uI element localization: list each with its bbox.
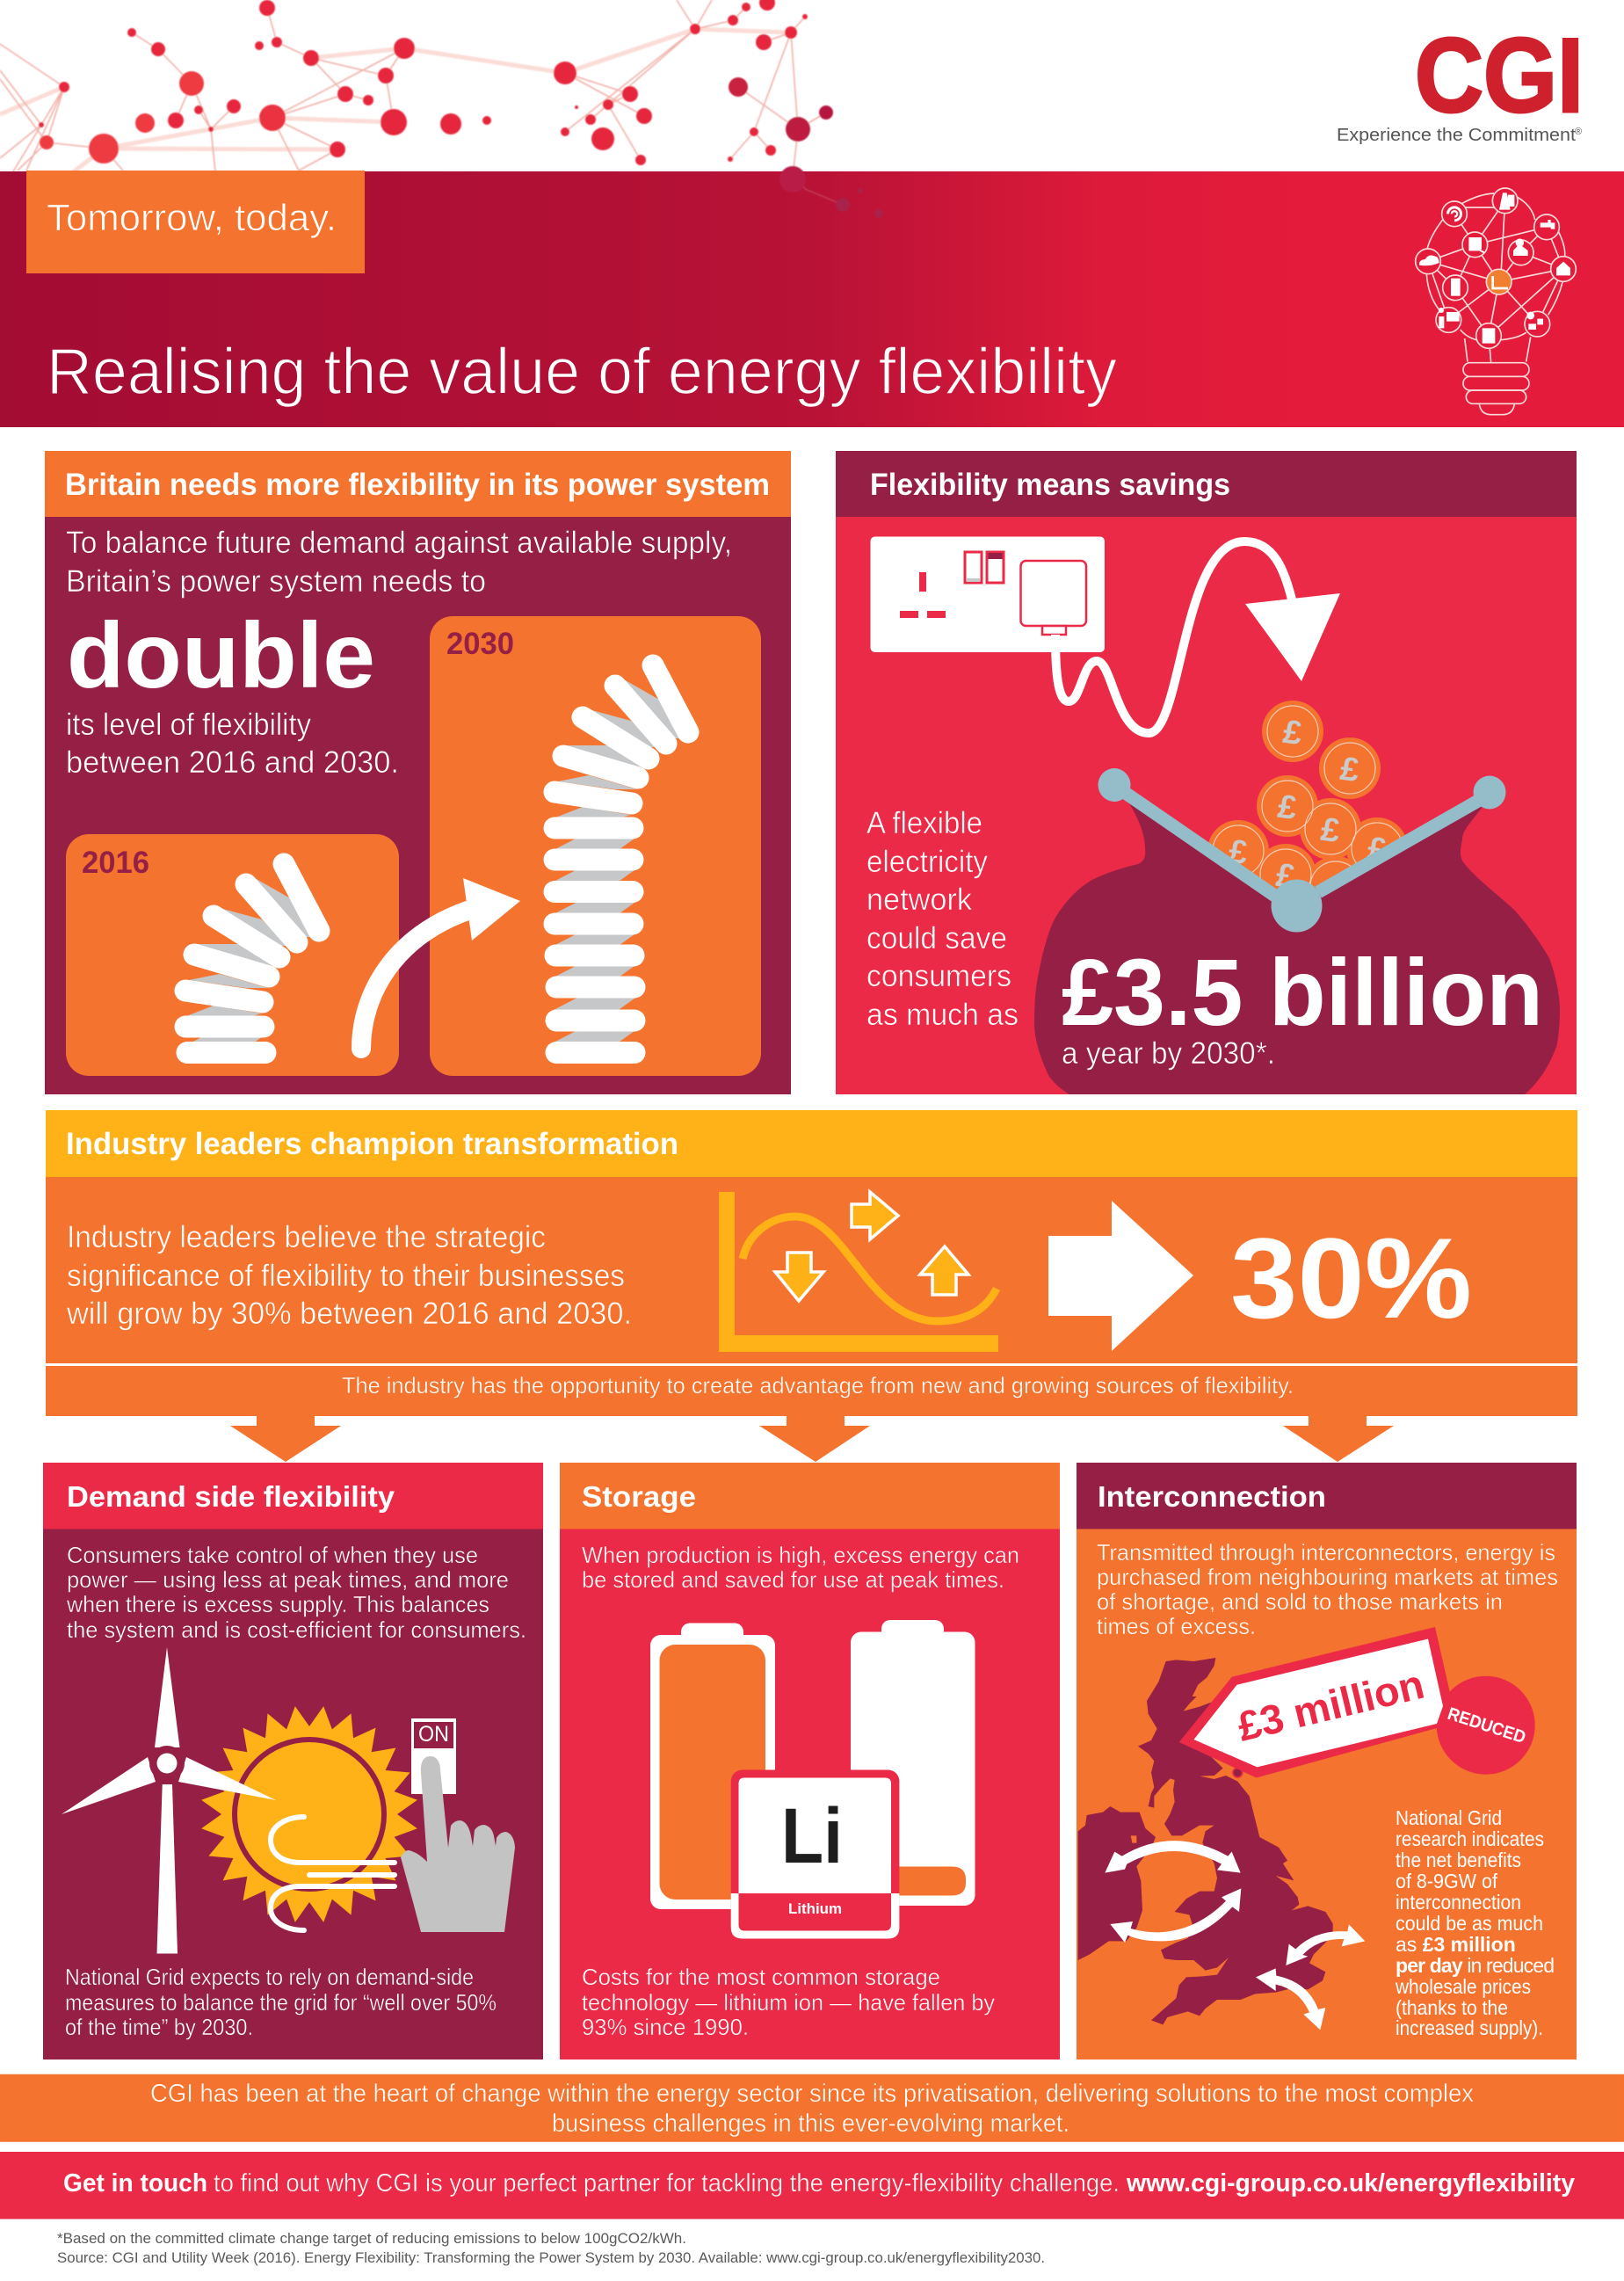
- big number: 30%: 30%: [1230, 1214, 1472, 1342]
- panel: Flexibility means savings: [836, 451, 1577, 1094]
- big word: double: double: [67, 604, 375, 708]
- body text: be stored and saved for use at peak times.: [582, 1566, 1004, 1593]
- body text: purchased from neighbouring markets at times: [1097, 1564, 1558, 1590]
- icon: purse: [1034, 768, 1560, 1094]
- box: 2030 spring: 2030: [446, 627, 514, 661]
- body text: [1097, 1539, 1558, 1639]
- follow-on text: between 2016 and 2030.: [66, 745, 399, 780]
- body text: when there is excess supply. This balances: [66, 1591, 489, 1617]
- heading: Britain needs more flexibility in its power system: [65, 468, 770, 502]
- text: a flexible electricity network: as much as: [866, 998, 1019, 1032]
- price tag: £3 million: REDUCED: [1445, 1704, 1528, 1747]
- icon: coins: £: [1275, 788, 1299, 827]
- panel: Industry leaders champion transformation: [46, 1110, 1577, 1363]
- logo: CGI: [1337, 17, 1584, 145]
- follow-on text: its level of flexibility: [66, 708, 311, 742]
- footnote text: of the time” by 2030.: [65, 2014, 253, 2040]
- band: CGI heart of change: business challenges in this ever-evolving market.: [552, 2110, 1069, 2138]
- follow-on text: [66, 708, 399, 780]
- title banner: [0, 166, 1624, 427]
- band: get in touch: Get in touch: [63, 2169, 207, 2197]
- text: a flexible electricity network: A flexible: [866, 806, 982, 840]
- arrow: cable to coins: [1055, 541, 1340, 733]
- panel: Interconnection: [1077, 1463, 1577, 2059]
- panel: Britain needs more flexibility: [45, 451, 791, 1094]
- logo: CGI: ®: [1575, 127, 1582, 137]
- band: get in touch: to find out why CGI is your perfect partner for tackling the energy-flexibility challenge.: [214, 2169, 1120, 2197]
- icon: coins: £: [1338, 751, 1361, 789]
- body text: [66, 1542, 526, 1643]
- lithium element card: Li: [781, 1791, 843, 1879]
- icon: ON switch: ON: [418, 1722, 449, 1747]
- icon: network lightbulb: [1416, 188, 1576, 415]
- side text: research indicates: [1396, 1827, 1544, 1850]
- footnote text: [582, 1964, 995, 2040]
- band: get in touch: www.cgi-group.co.uk/energyflexibility: [1126, 2169, 1575, 2197]
- icon: full battery: [650, 1623, 775, 1909]
- map: UK and Ireland: [1078, 1658, 1365, 2030]
- text: industry leaders believe: [66, 1220, 632, 1331]
- logo: CGI: Experience the Commitment: [1337, 126, 1576, 145]
- side text: interconnection: [1396, 1891, 1521, 1914]
- icon: coins: £: [1318, 811, 1342, 850]
- icon: coins: [1207, 701, 1408, 918]
- text: a flexible electricity network: consumers: [866, 959, 1011, 993]
- side text: wholesale prices: [1395, 1975, 1531, 1998]
- footnote text: technology — lithium ion — have fallen by: [582, 1989, 995, 2016]
- box: 2016 spring: 2016: [82, 846, 149, 880]
- side text: National Grid: [1396, 1806, 1502, 1829]
- text: industry leaders believe: significance of flexibility to their businesses: [67, 1259, 625, 1293]
- arrow: 2016 to 2030: [361, 878, 520, 1049]
- footnote text: Costs for the most common storage: [582, 1964, 940, 1990]
- lithium element card: Lithium: [788, 1900, 842, 1917]
- text: industry leaders believe: will grow by 30% between 2016 and 2030.: [66, 1297, 632, 1331]
- icon: coins: £: [1280, 714, 1304, 752]
- intro text: Britain’s power system needs to: [66, 564, 486, 599]
- arrows: interconnector flows: [1105, 1841, 1365, 2030]
- intro text: To balance future demand against available supply,: [66, 526, 732, 560]
- arrow: big white: [1048, 1201, 1193, 1351]
- side text: increased supply).: [1396, 2016, 1543, 2039]
- tagline box: [26, 171, 365, 273]
- footnote text: measures to balance the grid for “well over 50%: [65, 1989, 497, 2016]
- text: industry leaders believe: Industry leaders believe the strategic: [67, 1220, 546, 1254]
- band: get in touch: [0, 2152, 1624, 2219]
- text: a flexible electricity network: network: [866, 883, 972, 917]
- body text: the system and is cost-efficient for consumers.: [67, 1616, 526, 1643]
- side text: per day in reduced: [1396, 1954, 1555, 1977]
- footnote text: 93% since 1990.: [582, 2014, 749, 2040]
- tagline box: Tomorrow, today.: [47, 197, 337, 239]
- lithium element card: [731, 1770, 899, 1939]
- footnote and source: *Based on the committed climate change target of reducing emissions to below 100gCO2/kWh.: [57, 2230, 686, 2247]
- side text: the net benefits: [1396, 1849, 1521, 1871]
- side text: could be as much: [1396, 1912, 1543, 1935]
- footnote and source: [57, 2230, 1045, 2266]
- logo: CGI: CGI: [1415, 17, 1584, 134]
- side text: as £3 million: [1396, 1933, 1516, 1956]
- heading: Interconnection: [1098, 1480, 1326, 1513]
- arrows: down to columns: [230, 1415, 1394, 1462]
- body text: of shortage, and sold to those markets in: [1097, 1588, 1503, 1615]
- faded network nodes on banner: [779, 166, 883, 218]
- icon: sun: [201, 1706, 417, 1922]
- body text: Transmitted through interconnectors, energy is: [1097, 1539, 1555, 1565]
- intro text: [66, 526, 732, 599]
- box: 2030 spring: [430, 616, 761, 1076]
- chart: flexibility curve: [719, 1192, 998, 1352]
- text: a flexible electricity network: electricity: [866, 845, 988, 879]
- panel: Storage: [560, 1463, 1060, 2059]
- icon: coins: £: [1226, 833, 1250, 872]
- panel: Demand side flexibility: [43, 1463, 543, 2059]
- icon: coins: £: [1273, 857, 1297, 896]
- body text: power — using less at peak times, and more: [67, 1566, 509, 1593]
- body text: times of excess.: [1097, 1613, 1256, 1639]
- icon: coins: £: [1323, 869, 1347, 908]
- title: Realising the value of energy flexibility: [47, 335, 1117, 408]
- heading: Storage: [582, 1480, 696, 1513]
- band: opportunity with arrows: [46, 1366, 1577, 1462]
- side text: (thanks to the: [1396, 1996, 1508, 2019]
- band: CGI heart of change: [0, 2074, 1624, 2141]
- body text: When production is high, excess energy can: [582, 1542, 1019, 1568]
- icon: wind lines: [271, 1817, 395, 1930]
- icon: wind turbine: [62, 1647, 276, 1953]
- icon: ON switch: [411, 1718, 456, 1794]
- caption: a year by 2030: a year by 2030*.: [1062, 1036, 1275, 1071]
- text: a flexible electricity network: [866, 806, 1019, 1032]
- footnote and source: Source: CGI and Utility Week (2016). Energy Flexibility: Transforming the Power System by 2030. Available: www.cgi-group.co.uk/energyflexibility2030.: [57, 2249, 1045, 2266]
- price tag: £3 million: £3 million: [1233, 1660, 1428, 1750]
- band: opportunity with arrows: The industry has the opportunity to create advantage from new and growing sources of flexibility.: [342, 1372, 1294, 1398]
- header network decoration: [0, 0, 879, 229]
- heading: Industry leaders champion transformation: [66, 1127, 678, 1161]
- footnote text: [65, 1964, 497, 2040]
- body text: [582, 1542, 1019, 1593]
- big number: £3.5 billion: £3.5 billion: [1062, 939, 1543, 1045]
- heading: Demand side flexibility: [67, 1480, 395, 1513]
- text: a flexible electricity network: could save: [866, 921, 1007, 955]
- icon: empty battery: [851, 1620, 975, 1906]
- heading: Flexibility means savings: [870, 468, 1230, 502]
- side text: [1395, 1806, 1555, 2039]
- icon: coins: £: [1365, 831, 1388, 869]
- body text: Consumers take control of when they use: [67, 1542, 478, 1568]
- band: CGI heart of change: CGI has been at the heart of change within the energy sector since its privatisation, delivering solutions to the most complex: [150, 2080, 1474, 2108]
- box: 2016 spring: [66, 834, 399, 1076]
- footnote text: National Grid expects to rely on demand-side: [65, 1964, 474, 1990]
- icon: wall socket and plug: [870, 536, 1105, 652]
- price tag: £3 million: [1179, 1627, 1535, 1777]
- icon: pointing hand: [401, 1756, 515, 1932]
- side text: of 8-9GW of: [1396, 1870, 1498, 1892]
